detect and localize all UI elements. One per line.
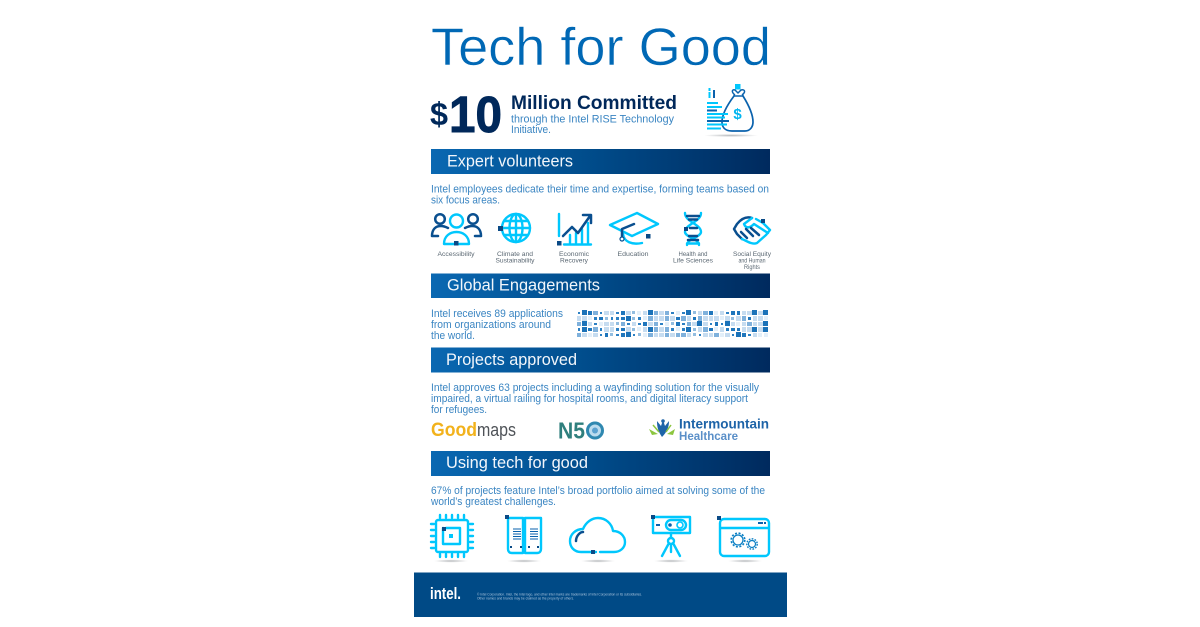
icon: cloud	[570, 518, 625, 562]
banner heading: Projects approved	[446, 350, 577, 369]
logo: n50: N5	[558, 418, 585, 444]
icon: browser window with gears	[717, 516, 769, 562]
icon: accessibility	[432, 214, 481, 246]
icon: graduation cap	[610, 213, 658, 244]
logo: n50	[558, 418, 602, 444]
dollar amount: $	[430, 96, 448, 132]
body text: the world.	[431, 330, 475, 342]
label: Social Equity	[733, 251, 772, 258]
banner heading: Global Engagements	[447, 276, 600, 294]
logo: goodmaps: maps	[477, 420, 516, 440]
funding description: through the Intel RISE Technology	[511, 114, 675, 126]
banner heading: Using tech for good	[446, 453, 588, 472]
panel: global engagements	[431, 274, 770, 342]
label: Climate and	[497, 251, 533, 258]
body text: from organizations around	[431, 319, 551, 331]
panel: using tech for good	[430, 451, 770, 562]
panel: projects approved	[431, 348, 770, 444]
banner heading	[431, 149, 770, 174]
icon: money bag and coins: $	[733, 106, 742, 123]
logo: goodmaps: Good	[431, 420, 477, 441]
ten: 10	[449, 86, 502, 143]
funding description: Initiative.	[511, 124, 551, 136]
chart: application squares	[576, 310, 769, 338]
body text: for refugees.	[431, 404, 487, 416]
body text: 67% of projects feature Intel’s broad portfolio aimed at solving some of the	[431, 485, 765, 497]
label: Accessibility	[438, 251, 475, 258]
body text: world’s greatest challenges.	[430, 496, 556, 508]
logo: intermountain healthcare	[649, 416, 769, 443]
title: Tech for Good	[431, 18, 771, 77]
panel: expert volunteers	[431, 149, 772, 271]
icon: globe	[498, 214, 530, 242]
logo: intermountain healthcare: Healthcare	[679, 431, 738, 443]
label: Sustainability	[496, 258, 535, 264]
legal text: © Intel Corporation. Intel, the Intel logo, and other Intel marks are trademarks of Intel Corporation or its subsidiaries.	[477, 592, 642, 596]
icon: server racks	[505, 515, 541, 562]
icon: projector on tripod	[651, 515, 690, 562]
footer band	[414, 572, 787, 617]
label: Recovery	[560, 258, 589, 264]
legal text: Other names and brands may be claimed as the property of others.	[477, 596, 574, 600]
icon: processor chip	[431, 515, 473, 562]
funding headline	[430, 86, 677, 143]
logo: intel: intel.	[430, 584, 461, 603]
logo: intermountain healthcare: Intermountain	[679, 416, 769, 432]
label: Rights	[744, 264, 760, 271]
label: Health and	[678, 251, 708, 258]
label: Education	[618, 251, 649, 258]
logo: goodmaps	[431, 420, 516, 441]
body text: impaired, a virtual railing for hospital rooms, and digital literacy support	[431, 393, 748, 405]
label: Economic	[559, 251, 590, 258]
body text: Intel receives 89 applications	[431, 308, 563, 320]
banner heading: Expert volunteers	[447, 152, 573, 170]
icon: dna helix	[684, 213, 701, 245]
icon: money bag and coins	[704, 84, 758, 137]
label: Life Sciences	[673, 258, 714, 264]
banner heading	[431, 274, 770, 298]
million committed: Million Committed	[511, 93, 677, 114]
body text: Intel approves 63 projects including a wayfinding solution for the visually	[431, 382, 759, 394]
icon: handshake	[734, 217, 770, 244]
body text: Intel employees dedicate their time and expertise, forming teams based on	[431, 184, 769, 196]
banner heading	[431, 451, 770, 476]
icon: growth chart	[557, 214, 591, 246]
body text: six focus areas.	[431, 194, 500, 206]
label: and Human	[738, 258, 766, 264]
banner heading	[431, 348, 770, 372]
